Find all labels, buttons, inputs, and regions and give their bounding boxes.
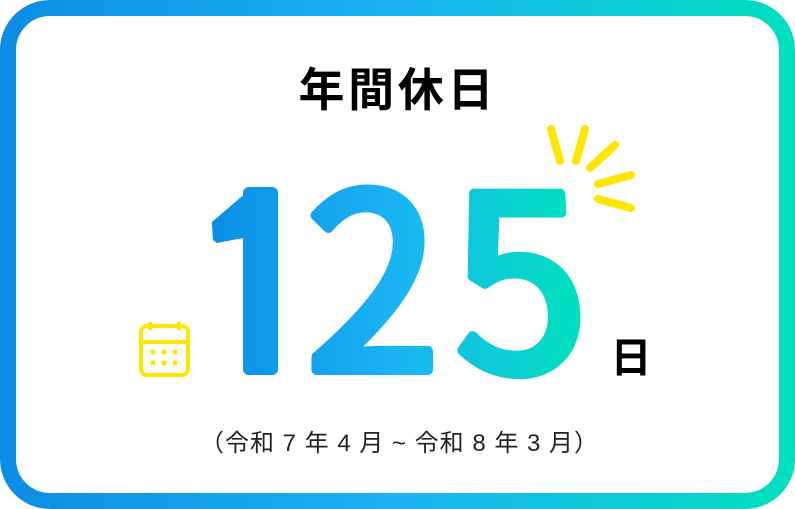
- digit 5: 5: [442, 90, 595, 441]
- unit: day: 日: [610, 335, 652, 381]
- digit 2: 2: [306, 89, 440, 440]
- digit 1: 1: [177, 129, 328, 433]
- caption: period: （令和 7 年 4 月 ~ 令和 8 年 3 月）: [200, 430, 598, 457]
- icon: sparkle rays: [551, 129, 631, 208]
- big number: 125: [212, 184, 580, 380]
- icon: calendar: [141, 322, 188, 375]
- heading: annual holidays: 年間休日: [298, 64, 494, 116]
